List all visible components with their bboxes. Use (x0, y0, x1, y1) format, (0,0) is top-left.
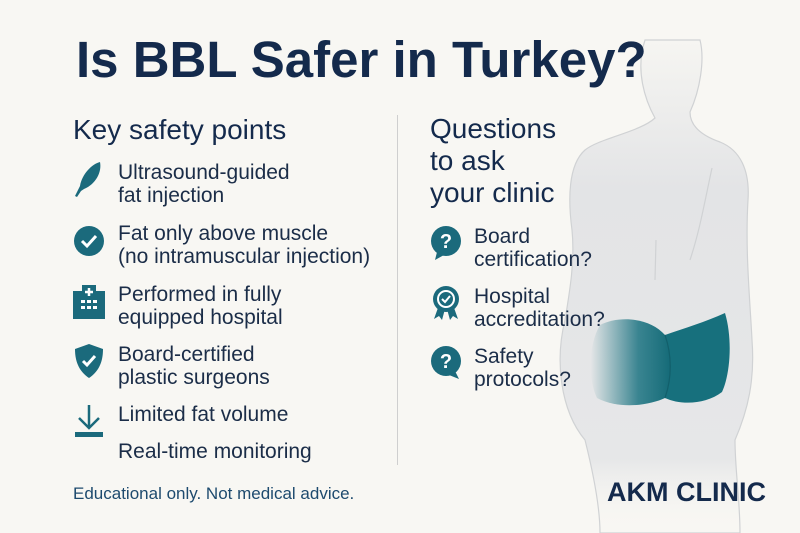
footer disclaimer: Educational only. Not medical advice. (73, 484, 354, 503)
icon: award (433, 286, 459, 320)
icon: check circle (74, 226, 104, 256)
icon: shield (75, 344, 103, 378)
icon: hospital (73, 285, 105, 319)
title: Is BBL Safer in Turkey? (76, 31, 647, 88)
heading: your clinic (430, 177, 554, 208)
text (118, 283, 283, 329)
text: Ultrasound-guided (118, 161, 290, 184)
text (118, 161, 290, 207)
text: Limited fat volume (118, 403, 288, 426)
butt (591, 313, 730, 405)
text: Safety (474, 345, 534, 368)
text: equipped hospital (118, 306, 283, 329)
divider (397, 115, 398, 465)
icon: question bubble: ? (440, 351, 452, 373)
text (474, 225, 592, 271)
heading: to ask (430, 145, 505, 176)
heading: Questions (430, 113, 556, 144)
icon: question bubble (431, 346, 461, 379)
heading (430, 113, 556, 208)
text: Board-certified (118, 343, 255, 366)
panel: questions (430, 113, 605, 391)
text: certification? (474, 248, 592, 271)
text: Real-time monitoring (118, 440, 312, 463)
text (118, 222, 370, 268)
text (474, 345, 571, 391)
text: protocols? (474, 368, 571, 391)
text: Performed in fully (118, 283, 281, 306)
icon: question bubble: ? (440, 231, 452, 253)
icon: down arrow (75, 405, 103, 437)
text: Board (474, 225, 530, 248)
icon: question bubble (431, 226, 461, 260)
text (474, 285, 605, 331)
heading: Key safety points (73, 114, 286, 145)
text: Fat only above muscle (118, 222, 328, 245)
text: accreditation? (474, 308, 605, 331)
text: fat injection (118, 184, 224, 207)
text: plastic surgeons (118, 366, 270, 389)
text: Hospital (474, 285, 550, 308)
text (118, 343, 270, 389)
brand: AKM CLINIC (607, 477, 766, 507)
panel: key safety points (73, 114, 370, 463)
text: (no intramuscular injection) (118, 245, 370, 268)
icon: syringe leaf (75, 162, 100, 197)
